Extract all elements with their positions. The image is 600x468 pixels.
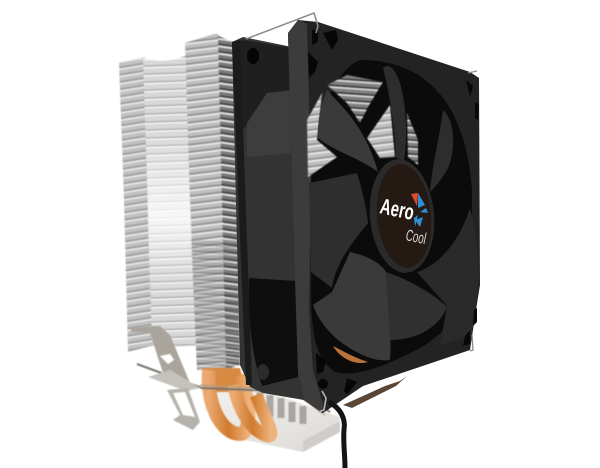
bottom clip [318,391,326,412]
frame opening [311,60,472,373]
hub label [373,162,435,270]
side wall recess bottom [249,278,298,386]
right hole [475,102,479,120]
left fin window [307,93,337,177]
frame corner holes [308,30,479,394]
logo blue shards [418,193,425,208]
aluminium base block [205,385,340,452]
frame left strip [288,20,324,413]
fan side wall [232,37,304,400]
fan power cable [329,402,345,468]
upper hole [312,30,318,45]
middle highlight [146,130,194,300]
base front lip [303,421,340,452]
left fin column [119,57,155,352]
lower side hole [257,364,269,380]
rear heat pipe [209,370,248,434]
clip upper plate [131,326,190,385]
blade: lower middle [386,272,447,340]
copper pipe top block [202,368,246,392]
mounting clip [131,326,330,430]
copper heat pipes [202,368,271,436]
blade: upper left [318,90,378,172]
top-right hole [466,80,473,97]
blade: narrow top [383,66,406,160]
right fin window [407,113,418,165]
fan blades [309,66,479,363]
logo word: Cool: Cool [404,226,428,248]
hub outer ring [365,156,439,276]
side wall recess top [247,90,292,157]
blade: lower right [417,208,479,345]
logo word: Aero: Aero [378,194,416,225]
hub [365,156,439,276]
side wall dark edge [232,40,252,385]
base grooves [260,392,303,424]
lower right fin shading [191,240,240,370]
right fin edge [218,36,240,370]
right lower clip [470,335,473,351]
clip slot [160,354,174,364]
retention wires [246,13,477,412]
bottom hole [344,378,357,394]
top wire [246,13,318,39]
clip crossbar [148,370,200,391]
front heat pipe [234,385,271,436]
blade: left dark [309,173,368,288]
right wire [468,71,477,73]
left hole [308,52,318,78]
upper fin window [327,75,383,123]
bottom-right hole [463,330,470,346]
side upper corner [236,40,292,135]
top-left hole [323,30,338,50]
lower circle hole [318,379,328,389]
copper glimpse [333,346,368,363]
middle concave fin column [143,55,197,347]
logo red shard [411,193,418,206]
logo mark [411,193,428,227]
clip wire [137,364,330,412]
right fin column [185,33,232,370]
centre fin window [367,105,395,158]
blade: lower left textured [313,252,391,360]
bottom-left hole [316,353,326,374]
copper sliver under fan [343,376,407,408]
front frame [288,20,480,413]
clip lower plate [167,388,200,430]
fan assembly [232,20,480,413]
blade: right [430,110,453,192]
heat sink fin stack [119,33,240,370]
heat sink seen through fan [307,75,418,177]
right lower hole [473,308,477,326]
side mounting hole [247,48,259,64]
